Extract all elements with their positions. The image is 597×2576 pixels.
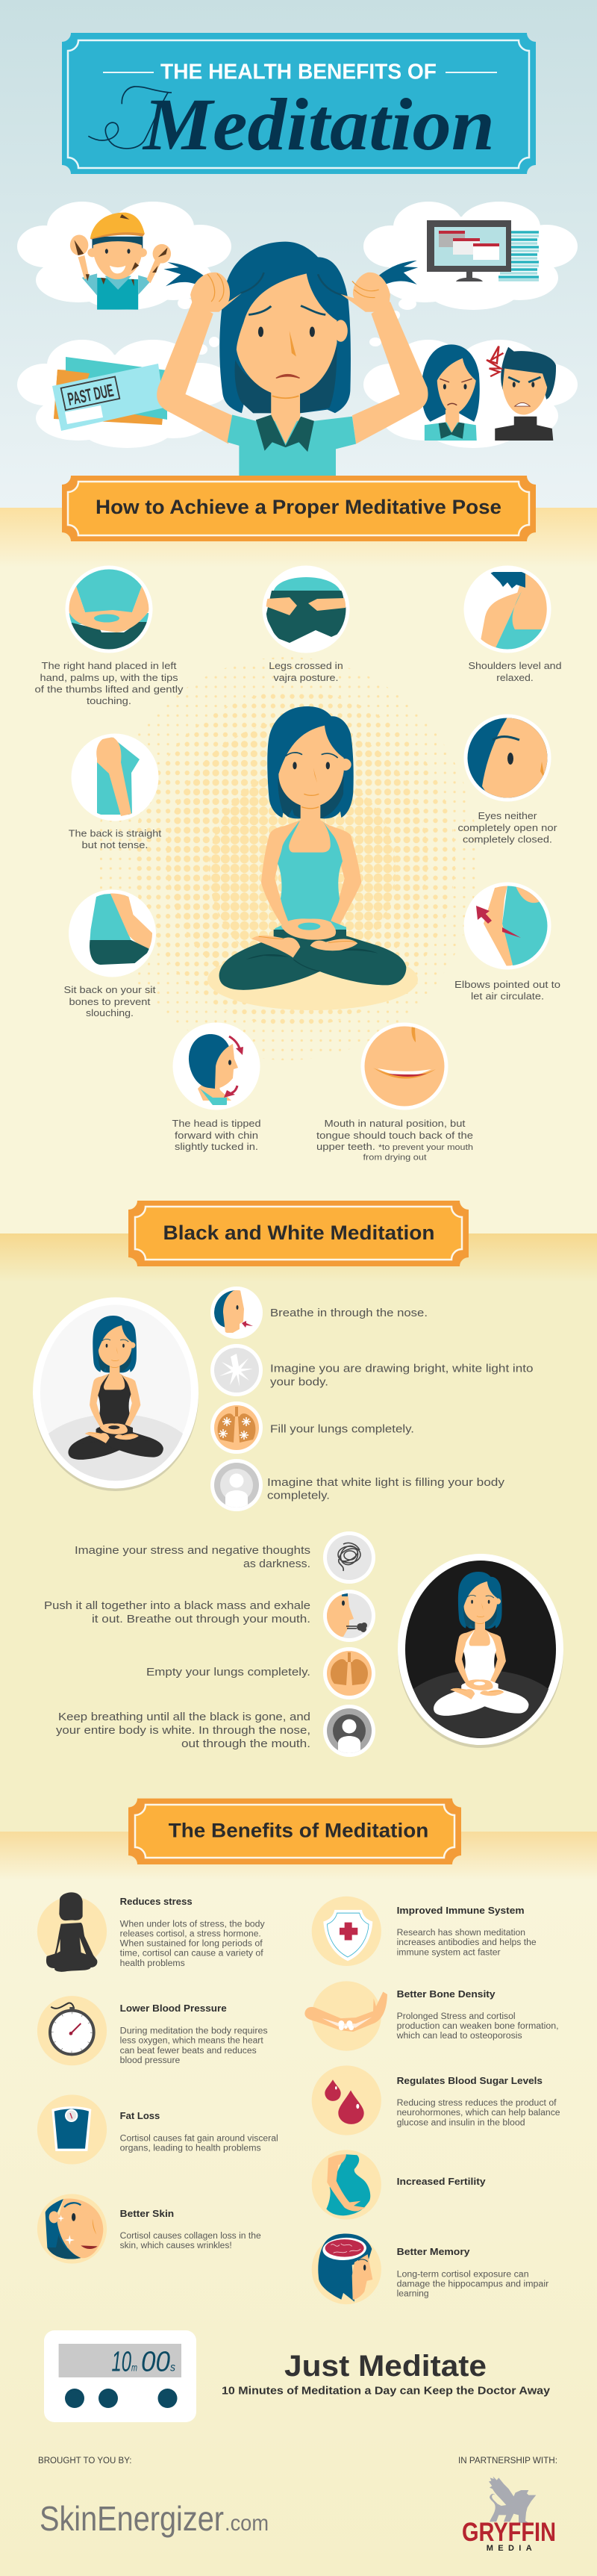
shirt <box>228 415 356 476</box>
hands <box>190 273 390 312</box>
benefit: bone density: which can lead to osteoporosis <box>396 2032 522 2041</box>
timer digits: s <box>170 2362 175 2374</box>
footer right label: IN PARTNERSHIP WITH: <box>458 2457 557 2465</box>
logo: SkinEnergizer: SkinEnergizer <box>40 2499 224 2538</box>
caption: of the thumbs lifted and gently <box>34 684 184 695</box>
benefit: immune: Research has shown meditation <box>397 1929 525 1938</box>
step: bright light text: Imagine you are drawing bright, white light into <box>270 1362 533 1375</box>
caption <box>458 810 557 845</box>
title line one: THE HEALTH BENEFITS OF <box>160 60 437 84</box>
benefit: reduces stress: When under lots of stress, the body <box>120 1920 265 1929</box>
caption: bones to prevent <box>69 996 151 1007</box>
benefit: better skin <box>120 2208 261 2250</box>
step: exhale icon <box>323 1590 375 1642</box>
step: keep breathing text: Keep breathing until all the black is gone, and <box>58 1711 310 1723</box>
title banner <box>62 33 536 174</box>
benefit: fat loss: Fat Loss <box>120 2110 160 2121</box>
heading banner: black and white <box>128 1201 469 1266</box>
caption: forward with chin <box>175 1130 258 1141</box>
just meditate headline: Just Meditate <box>284 2350 487 2383</box>
benefit: immune <box>397 1905 537 1957</box>
benefit: blood sugar: neurohormones, which can help balance <box>397 2109 560 2118</box>
caption: mouth <box>316 1118 473 1162</box>
step: darkness text <box>75 1544 310 1570</box>
caption: The back is straight <box>69 827 162 839</box>
benefit: reduces stress <box>120 1896 265 1968</box>
step: full lungs text: Fill your lungs completely. <box>270 1423 414 1436</box>
benefit icon: scale <box>37 2094 107 2165</box>
thought clouds <box>17 202 578 448</box>
logo: Gryffin Media: MEDIA <box>487 2544 532 2553</box>
caption: slightly tucked in. <box>175 1141 258 1152</box>
benefit: memory: Better Memory <box>397 2246 470 2257</box>
timer digits: 00 <box>141 2347 170 2378</box>
caption <box>469 660 561 683</box>
benefit icon: pregnancy <box>312 2150 381 2220</box>
step: darkness text: Imagine your stress and negative thoughts <box>75 1544 310 1557</box>
logo: Gryffin Media <box>462 2477 556 2553</box>
icon: computer monitor and paper stack <box>427 220 539 281</box>
benefit: blood sugar <box>397 2075 560 2127</box>
caption: Legs crossed in <box>269 660 343 671</box>
white oval with figure in black <box>33 1298 199 1491</box>
benefit: reduces stress: releases cortisol, a stress hormone. <box>120 1929 261 1938</box>
arms <box>157 302 428 444</box>
benefit: better skin: Better Skin <box>120 2208 174 2219</box>
step: bright light text: your body. <box>270 1375 328 1389</box>
meditation mat <box>207 949 418 1010</box>
benefit icon: brain <box>312 2234 381 2304</box>
step: breathe in icon <box>210 1287 263 1339</box>
benefit: reduces stress: time, cortisol can cause a variety of <box>120 1950 264 1959</box>
caption: touching. <box>87 695 131 706</box>
benefit: immune: immune system act faster <box>397 1948 501 1957</box>
heading text: The Benefits of Meditation <box>169 1819 428 1841</box>
step: keep breathing text: out through the mouth. <box>181 1737 310 1750</box>
main meditating figure <box>219 706 406 990</box>
caption: vajra posture. <box>273 672 339 683</box>
caption: completely open nor <box>458 822 557 833</box>
benefit: bone density: Better Bone Density <box>397 1988 496 2000</box>
benefit: fat loss <box>120 2110 278 2153</box>
benefit: reduces stress: Reduces stress <box>120 1896 193 1907</box>
benefit: fat loss: organs, leading to health problems <box>120 2144 261 2153</box>
pose circle: sit bones <box>64 890 156 1018</box>
caption: mouth: tongue should touch back of the <box>316 1130 473 1141</box>
benefit icon: stopwatch <box>37 1996 107 2065</box>
benefit: blood sugar: Regulates Blood Sugar Levels <box>397 2075 543 2086</box>
benefit: bone density <box>396 1988 559 2041</box>
hair <box>219 242 351 413</box>
pose circle: shoulders <box>464 566 561 683</box>
timer digits: m <box>131 2362 137 2374</box>
caption: slouching. <box>86 1007 134 1018</box>
caption <box>69 827 162 850</box>
step: exhale text: it out. Breathe out through your mouth. <box>92 1613 310 1625</box>
timer digits <box>112 2347 175 2378</box>
icon: past due envelopes <box>52 357 167 431</box>
decorative swash <box>88 87 172 149</box>
benefit: blood sugar: Reducing stress reduces the product of <box>397 2099 557 2108</box>
logo: Gryffin Media: GRYFFIN <box>462 2518 556 2547</box>
benefit icon: silhouette <box>37 1892 107 1972</box>
pose circle: hands <box>34 564 184 706</box>
benefit: lower blood pressure: During meditation the body requires <box>120 2026 268 2035</box>
pose circle: eyes <box>458 714 557 845</box>
benefit icon: bone <box>304 1981 387 2051</box>
benefit icon: blood drops <box>312 2065 381 2135</box>
benefit: lower blood pressure: blood pressure <box>120 2056 180 2065</box>
benefit: better skin: skin, which causes wrinkles! <box>120 2241 232 2250</box>
step: body filled text: completely. <box>267 1490 330 1502</box>
step: body filled with light icon <box>210 1459 263 1511</box>
heading banner: benefits <box>128 1799 461 1864</box>
face <box>237 273 337 396</box>
step: empty lungs text: Empty your lungs completely. <box>146 1666 310 1679</box>
step: bright light icon <box>210 1344 263 1396</box>
benefit: reduces stress: When sustained for long periods of <box>120 1940 263 1949</box>
benefit: bone density: production can weaken bone formation, <box>397 2022 559 2031</box>
benefit: memory: damage the hippocampus and impair <box>397 2280 548 2289</box>
benefit: memory: Long-term cortisol exposure can <box>397 2270 529 2279</box>
benefit: immune: Improved Immune System <box>397 1905 525 1916</box>
benefit icon: shield <box>312 1897 381 1966</box>
step: darkness text: as darkness. <box>243 1558 310 1570</box>
step: exhale text <box>44 1599 310 1625</box>
benefit: fat loss: Cortisol causes fat gain around visceral <box>120 2134 278 2143</box>
step: bright light text <box>270 1362 533 1389</box>
stamp text: PAST DUE <box>66 381 116 410</box>
benefit: memory <box>397 2246 548 2299</box>
caption: The head is tipped <box>172 1118 261 1129</box>
caption <box>269 660 343 683</box>
hair tufts <box>163 261 418 290</box>
icon: construction worker <box>70 213 171 310</box>
caption: let air circulate. <box>471 990 544 1002</box>
pose circle: head <box>172 1023 261 1152</box>
step: exhale text: Push it all together into a black mass and exhale <box>44 1599 310 1612</box>
caption <box>454 979 560 1002</box>
pose circle: mouth <box>361 1023 448 1110</box>
step: body filled text <box>267 1476 505 1502</box>
logo: SkinEnergizer: .com <box>225 2511 269 2536</box>
caption: mouth: Mouth in natural position, but <box>324 1118 466 1129</box>
pose circle: legs <box>263 566 349 683</box>
caption: completely closed. <box>463 833 552 845</box>
step: keep breathing text: your entire body is white. In through the nose, <box>56 1724 310 1737</box>
benefit: immune: increases antibodies and helps the <box>397 1938 537 1947</box>
icon: arguing couple <box>422 344 556 441</box>
tagline: 10 Minutes of Meditation a Day can Keep the Doctor Away <box>222 2385 551 2397</box>
pose circle: elbows <box>454 883 560 1002</box>
caption: mouth: *to prevent your mouth <box>378 1143 473 1152</box>
caption: Shoulders level and <box>469 660 561 671</box>
step: keep breathing text <box>56 1711 310 1750</box>
timer digits: 10 <box>112 2347 131 2378</box>
caption: The right hand placed in left <box>42 660 177 671</box>
pose circle: back <box>69 733 162 850</box>
caption <box>34 660 184 706</box>
benefit: reduces stress: health problems <box>120 1959 185 1968</box>
benefit: lower blood pressure: can beat fewer beats and reduces <box>120 2047 257 2056</box>
step: scribble icon <box>323 1531 375 1584</box>
benefit: bone density: Prolonged Stress and cortisol <box>397 2012 516 2021</box>
benefit: lower blood pressure <box>120 2003 268 2065</box>
halftone dots <box>97 657 478 1060</box>
benefit: better skin: Cortisol causes collagen loss in the <box>120 2232 261 2241</box>
benefit: blood sugar: glucose and insulin in the blood <box>397 2118 525 2127</box>
caption: mouth: from drying out <box>363 1153 427 1162</box>
caption: Eyes neither <box>478 810 537 821</box>
title line two: Meditation <box>142 83 495 166</box>
caption: mouth: upper teeth. <box>316 1141 375 1152</box>
step: keep breathing icon <box>323 1705 375 1757</box>
heading text: Black and White Meditation <box>163 1222 434 1244</box>
black oval with figure in white <box>398 1554 563 1748</box>
caption: Elbows pointed out to <box>454 979 560 990</box>
caption <box>64 984 156 1018</box>
benefit icon: skin <box>37 2194 107 2264</box>
heading banner: pose <box>62 476 536 541</box>
benefit: lower blood pressure: less oxygen, which means the heart <box>120 2037 264 2046</box>
benefit: lower blood pressure: Lower Blood Pressure <box>120 2003 227 2014</box>
benefit: fertility: Increased Fertility <box>397 2176 486 2187</box>
benefit: memory: learning <box>397 2290 429 2299</box>
timer <box>44 2330 196 2422</box>
step: full lungs icon <box>210 1401 263 1454</box>
caption: relaxed. <box>496 672 534 683</box>
step: empty lungs icon <box>323 1647 375 1699</box>
footer left label: BROUGHT TO YOU BY: <box>38 2457 131 2465</box>
stressed woman <box>157 242 428 476</box>
step: body filled text: Imagine that white light is filling your body <box>267 1476 505 1489</box>
step: breathe in text: Breathe in through the nose. <box>270 1307 428 1319</box>
caption: but not tense. <box>82 839 148 850</box>
caption: Sit back on your sit <box>64 984 156 995</box>
caption: hand, palms up, with the tips <box>40 672 178 683</box>
heading text: How to Achieve a Proper Meditative Pose <box>96 496 501 518</box>
caption <box>172 1118 261 1152</box>
